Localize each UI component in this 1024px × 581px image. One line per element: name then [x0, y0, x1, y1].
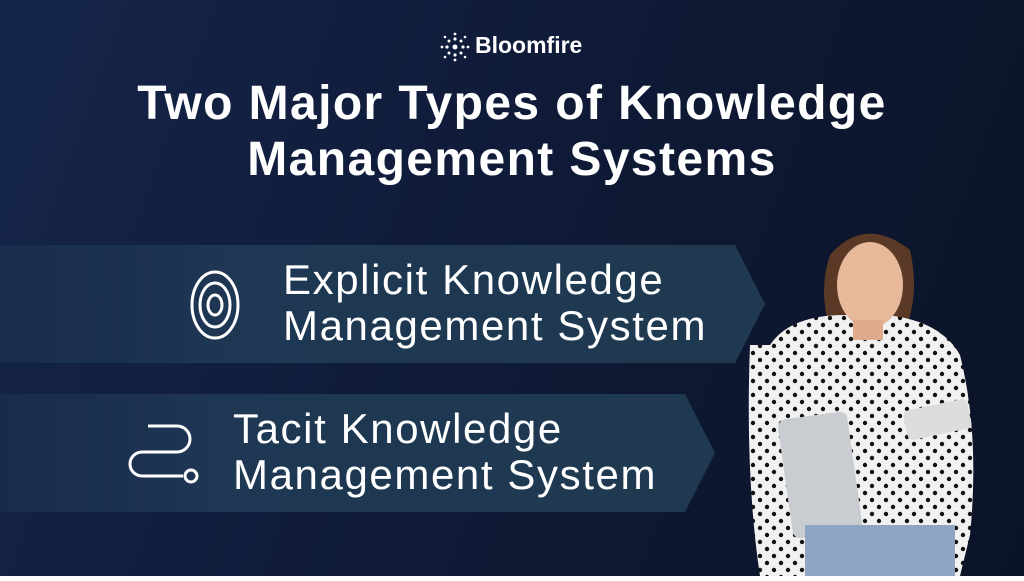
- logo: Bloomfire: [475, 32, 582, 58]
- panel: tacit banner: [0, 394, 715, 512]
- title: Management Systems: [247, 133, 777, 186]
- panel: explicit banner: [0, 245, 765, 363]
- text: tacit: Tacit Knowledge: [233, 405, 563, 452]
- title: [137, 77, 887, 186]
- text: tacit: [233, 405, 657, 498]
- text: explicit: [283, 256, 707, 349]
- illustration: woman: [748, 234, 974, 576]
- text: explicit: Explicit Knowledge: [283, 256, 664, 303]
- logo: [440, 32, 582, 62]
- icon: path: [128, 424, 198, 484]
- text: explicit: Management System: [283, 302, 707, 349]
- icon: bloom sunburst: [440, 32, 470, 62]
- title: Two Major Types of Knowledge: [137, 77, 887, 130]
- icon: concentric circles: [190, 270, 240, 340]
- text: tacit: Management System: [233, 451, 657, 498]
